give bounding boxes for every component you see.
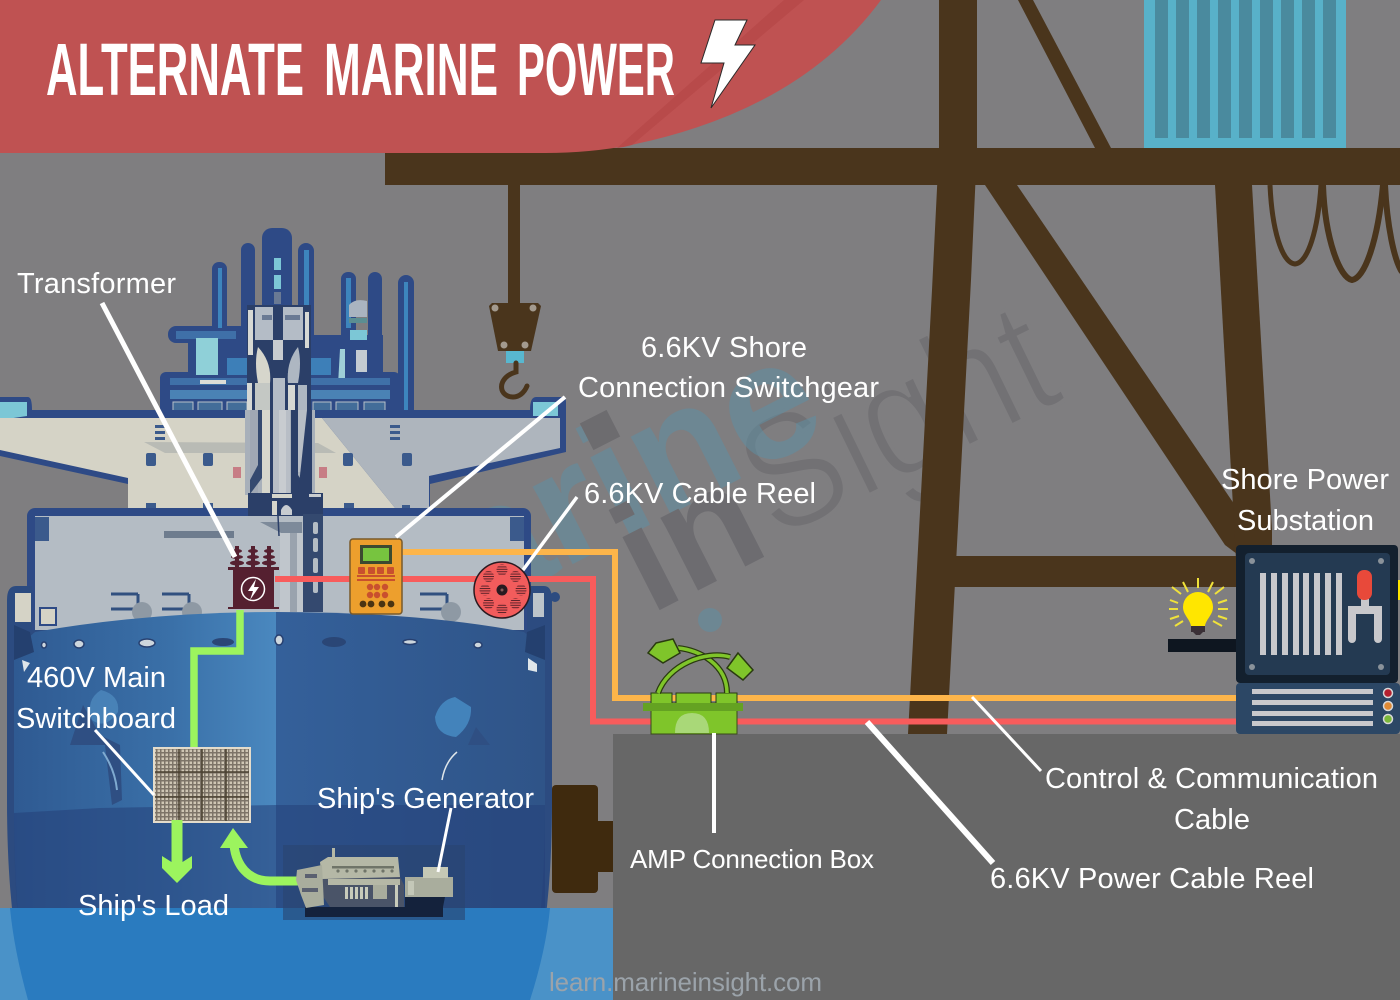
label: transformer: Transformer (17, 268, 176, 300)
label: shore connection switchgear (578, 332, 879, 404)
leader line: cable reel (523, 497, 577, 570)
leader line: switchgear (396, 397, 565, 537)
leader line: AMP box (712, 733, 716, 833)
label: cable reel: 6.6KV Cable Reel (584, 478, 816, 510)
label: shore connection switchgear: 6.6KV Shore (641, 332, 807, 364)
upper tower (247, 305, 311, 415)
control and communication cable (402, 552, 1236, 698)
funnels and masts (160, 228, 414, 420)
icon: light bulb on shelf (1168, 578, 1236, 652)
leader line: main switchboard (95, 730, 154, 795)
label: control and communication cable: Control & Communication (1045, 763, 1378, 795)
label: control and communication cable: Cable (1174, 804, 1250, 836)
ship's generator (296, 848, 453, 917)
dock fender (552, 785, 613, 893)
label: shore power substation: Substation (1237, 505, 1374, 537)
leader line: power cable reel (867, 722, 993, 863)
label: power cable reel: 6.6KV Power Cable Reel (990, 863, 1314, 895)
bridge wings deck (0, 397, 566, 516)
label: ship's generator: Ship's Generator (317, 783, 534, 815)
label: main switchboard (16, 662, 176, 735)
watermark: marine insight: marine (282, 299, 848, 709)
label: main switchboard: Switchboard (16, 703, 176, 735)
watermark: marine insight: in (586, 428, 788, 644)
title: MARINE (324, 28, 498, 111)
power cable (275, 579, 1236, 722)
460V main switchboard (153, 747, 251, 823)
ship superstructure (0, 228, 566, 638)
main accommodation block (27, 508, 531, 638)
arrow: ship's load (162, 820, 192, 883)
source credit: learn.marineinsight.com (549, 967, 822, 997)
title (46, 28, 675, 111)
watermark: marine insight: Sight (710, 265, 1082, 572)
label: shore power substation (1221, 464, 1389, 537)
icon: lightning bolt (701, 20, 755, 108)
water (0, 908, 613, 1000)
label: main switchboard: 460V Main (27, 662, 166, 694)
title: ALTERNATE (46, 28, 304, 111)
crane hook (489, 185, 541, 397)
ship internal power line (194, 610, 240, 750)
title: POWER (517, 28, 675, 111)
dock (613, 734, 1400, 1000)
ship hull (7, 586, 560, 1000)
generator backing panel (283, 845, 465, 920)
leader line: transformer (102, 303, 235, 557)
central tower (245, 305, 323, 612)
label: shore connection switchgear: Connection Switchgear (578, 372, 879, 404)
shore power substation (1236, 545, 1400, 734)
label: control and communication cable (1045, 763, 1378, 836)
shipping container (1144, 0, 1346, 148)
label: ship's load: Ship's Load (78, 890, 229, 922)
title banner (0, 0, 881, 153)
label: AMP connection box: AMP Connection Box (630, 844, 874, 874)
transformer (228, 546, 279, 609)
crane structure (385, 0, 1400, 734)
leader line: control cable (972, 697, 1041, 771)
AMP connection box (643, 639, 753, 734)
lower tower (245, 410, 323, 612)
label: shore power substation: Shore Power (1221, 464, 1389, 496)
cable reel (474, 562, 530, 618)
arrow: generator to switchboard (220, 828, 322, 881)
switchgear (350, 539, 402, 614)
leader line: generator (438, 808, 451, 872)
watermark: marine insight (282, 265, 1082, 709)
